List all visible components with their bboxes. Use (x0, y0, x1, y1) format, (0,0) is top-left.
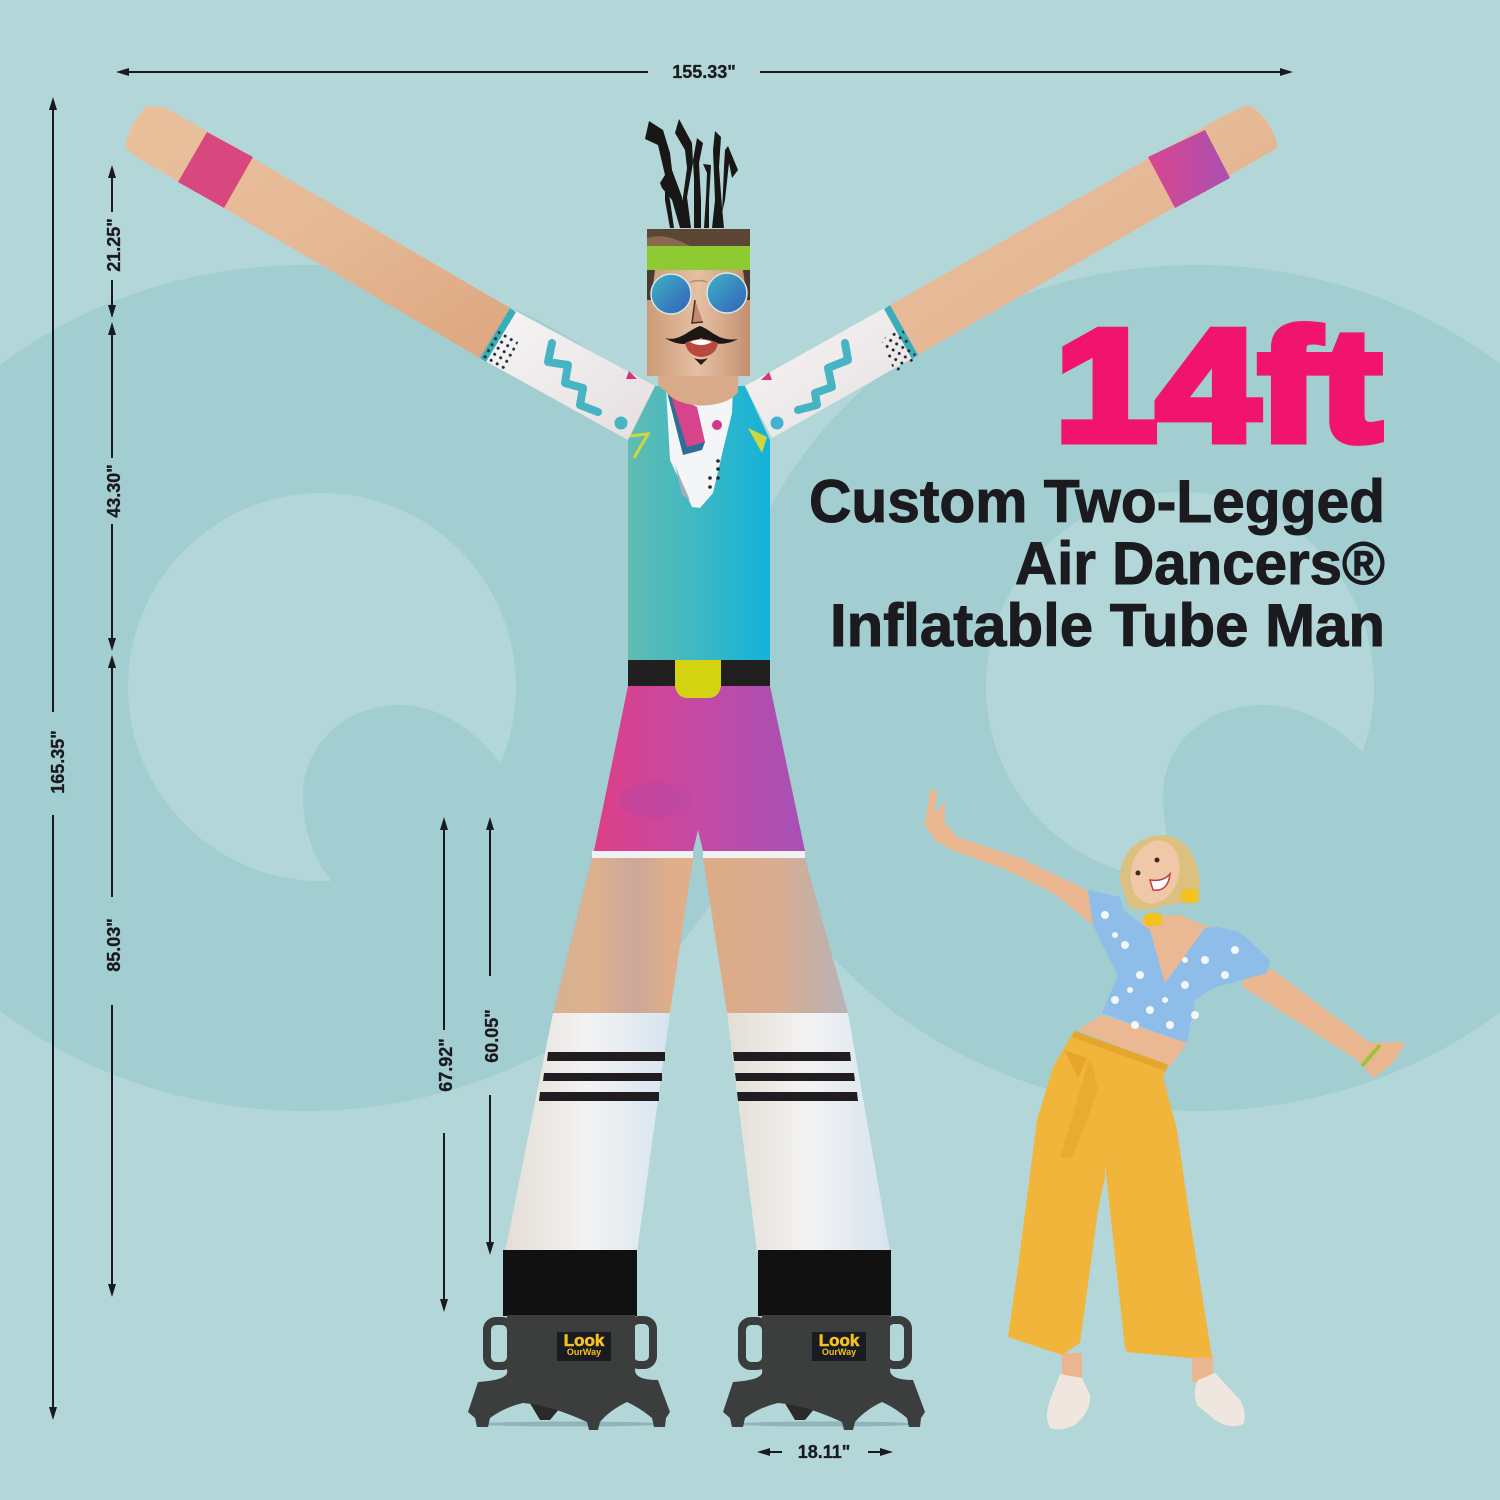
dimension: torso 43.30: 43.30" (104, 464, 124, 518)
dimension: arm length 21.25: 21.25" (104, 218, 124, 272)
air dancer figure (125, 105, 1277, 1252)
woman: neck and midriff (1077, 915, 1215, 1067)
neck (658, 376, 738, 406)
blower: left: OurWay (567, 1347, 601, 1357)
dimension: 60.05 (482, 817, 502, 1255)
dimension: torso 43.30 (104, 322, 124, 651)
blower: left: Look (564, 1331, 605, 1350)
belt (628, 660, 770, 698)
woman: bracelet (1362, 1045, 1380, 1066)
torso (628, 386, 770, 660)
heading: product title: Custom Two-Legged (809, 468, 1385, 535)
blower: right: Look (819, 1331, 860, 1350)
heading: product title: Inflatable Tube Man (830, 592, 1385, 659)
left arm (125, 106, 655, 440)
blower: right (723, 1250, 925, 1430)
dimension: 67.92: 67.92" (436, 1038, 456, 1092)
dimension: 67.92 (436, 817, 456, 1312)
dimension: leg 85.03 (104, 655, 124, 1297)
blower: right: OurWay (822, 1347, 856, 1357)
woman: arms (925, 790, 1403, 1078)
woman for scale (925, 790, 1403, 1429)
woman: trousers (1008, 1033, 1212, 1358)
heading: 14ft: 14ft (1055, 298, 1381, 474)
background swirl: left (0, 265, 777, 1111)
hair (645, 119, 738, 228)
woman: ankles and shoes (1047, 1353, 1245, 1429)
right leg (703, 858, 890, 1252)
dimension: base width 18.11: 18.11" (798, 1442, 850, 1462)
head (647, 229, 750, 376)
woman: head (1120, 835, 1200, 926)
heading: product title: Air Dancers® (1015, 530, 1385, 597)
shorts (592, 686, 805, 858)
dimension: leg 85.03: 85.03" (104, 918, 124, 972)
blower: left (468, 1250, 670, 1430)
dimension: overall height 165.35: 165.35" (48, 730, 68, 794)
background swirl: right (725, 265, 1500, 1111)
dimension: 60.05: 60.05" (482, 1009, 502, 1063)
woman: top (1088, 890, 1270, 1043)
dimension: overall height 165.35 (48, 97, 68, 1420)
dimension: arm length 21.25 (104, 165, 124, 318)
heading: product title (809, 468, 1385, 659)
right arm (745, 105, 1277, 438)
left leg (505, 858, 693, 1252)
dimension: base width 18.11 (757, 1442, 893, 1462)
dimension: overall width 155.33: 155.33" (672, 62, 736, 82)
dimension: overall width 155.33 (116, 62, 1293, 82)
